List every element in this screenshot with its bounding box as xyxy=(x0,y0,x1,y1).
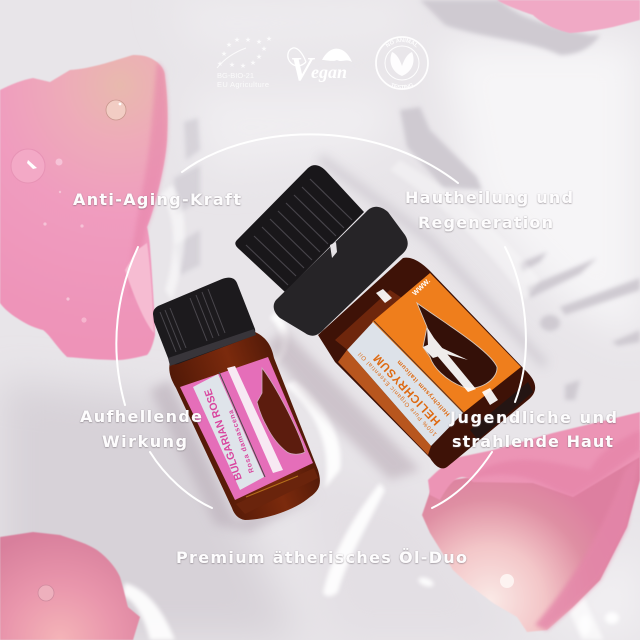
water droplet large xyxy=(11,149,45,183)
caption: Aufhellende Wirkung: Aufhellende xyxy=(80,407,202,426)
cap collar xyxy=(274,207,408,336)
white ripples xyxy=(122,160,619,640)
logo: no animal testing xyxy=(375,36,429,90)
gray water shadows xyxy=(174,0,640,400)
descriptor: 100% Pure Organic Essential Oil xyxy=(358,351,438,437)
logo: EU organic leaf: ★ xyxy=(240,62,246,70)
logo: EU organic leaf: ★ xyxy=(261,45,267,53)
caption: Aufhellende Wirkung: Wirkung xyxy=(102,432,187,451)
logo: Vegan: egan xyxy=(311,62,347,82)
water droplet small xyxy=(106,100,126,120)
petal upper fold xyxy=(428,412,640,500)
water droplet xyxy=(38,585,54,601)
circular arc: top xyxy=(182,134,458,183)
caption: Aufhellende Wirkung xyxy=(80,407,202,451)
drop window xyxy=(417,303,497,388)
logo: EU organic leaf: BG-BIO-21 xyxy=(217,71,254,80)
caption: Hautheilung und Regeneration: Regeneration xyxy=(418,213,553,232)
circular arc: lower left xyxy=(150,452,212,508)
label reflections xyxy=(376,289,498,405)
rose petal: top right xyxy=(497,0,640,33)
logo: EU organic leaf: ★ xyxy=(217,60,223,68)
label name: BULGARIAN ROSE xyxy=(202,387,245,482)
product name: HELICHRYSUM xyxy=(372,352,443,427)
bottle glass xyxy=(318,258,535,468)
label drop window xyxy=(257,368,305,454)
caption: Jugendliche und strahlende Haut: strahlende Haut xyxy=(452,432,613,451)
logo: Vegan: V xyxy=(290,51,315,88)
logo: Vegan xyxy=(288,48,352,88)
logo: EU organic leaf xyxy=(217,35,272,89)
orange label xyxy=(338,273,521,455)
bottle: Helichrysum xyxy=(235,165,535,468)
circular arc: lower right xyxy=(432,452,492,508)
logo: EU organic leaf: ★ xyxy=(250,59,256,67)
logo: EU organic leaf: EU Agriculture xyxy=(217,80,269,89)
logo: EU organic leaf: ★ xyxy=(256,53,262,61)
water droplet xyxy=(500,574,514,588)
rose petal: bottom right xyxy=(422,412,640,632)
logo: no animal testing: NO ANIMAL xyxy=(386,38,417,48)
certification logos xyxy=(216,35,429,90)
bottle label xyxy=(180,357,313,500)
bottle glass xyxy=(169,332,320,520)
rose petal: top left xyxy=(0,55,168,360)
logo: no animal testing: TESTING xyxy=(392,83,413,88)
rose petal: bottom left xyxy=(0,532,140,640)
circular arc: right xyxy=(505,247,526,402)
bottle: Bulgarian Rose xyxy=(153,278,320,520)
label latin name: Rosa damascena xyxy=(228,409,256,474)
caption: Premium ätherisches Öl-Duo: Premium ätherisches Öl-Duo xyxy=(176,548,467,567)
logo: EU organic leaf: ★ xyxy=(256,38,262,46)
logo: EU organic leaf: ★ xyxy=(226,41,232,49)
logo: EU organic leaf: ★ xyxy=(221,50,227,58)
circular arc: left xyxy=(116,247,138,405)
petal lower body xyxy=(422,450,640,632)
caption: Jugendliche und strahlende Haut xyxy=(449,408,617,451)
caption: Jugendliche und strahlende Haut: Jugendliche und xyxy=(449,408,617,427)
bottle cap xyxy=(153,278,256,366)
logo: EU organic leaf: ★ xyxy=(229,61,235,69)
shadows and halos around bottles xyxy=(150,158,545,532)
website text: WWW. xyxy=(412,278,432,297)
latin name: Helichrysum italicum xyxy=(396,358,451,417)
logo: EU organic leaf: ★ xyxy=(245,36,251,44)
petal right fold xyxy=(129,62,168,300)
ribbed cap xyxy=(235,165,364,292)
logo: EU organic leaf: ★ xyxy=(266,35,272,43)
caption: Hautheilung und Regeneration xyxy=(405,188,573,232)
caption: Anti-Aging-Kraft: Anti-Aging-Kraft xyxy=(73,190,241,209)
caption: Hautheilung und Regeneration: Hautheilung und xyxy=(405,188,573,207)
logo: EU organic leaf: ★ xyxy=(234,36,240,44)
